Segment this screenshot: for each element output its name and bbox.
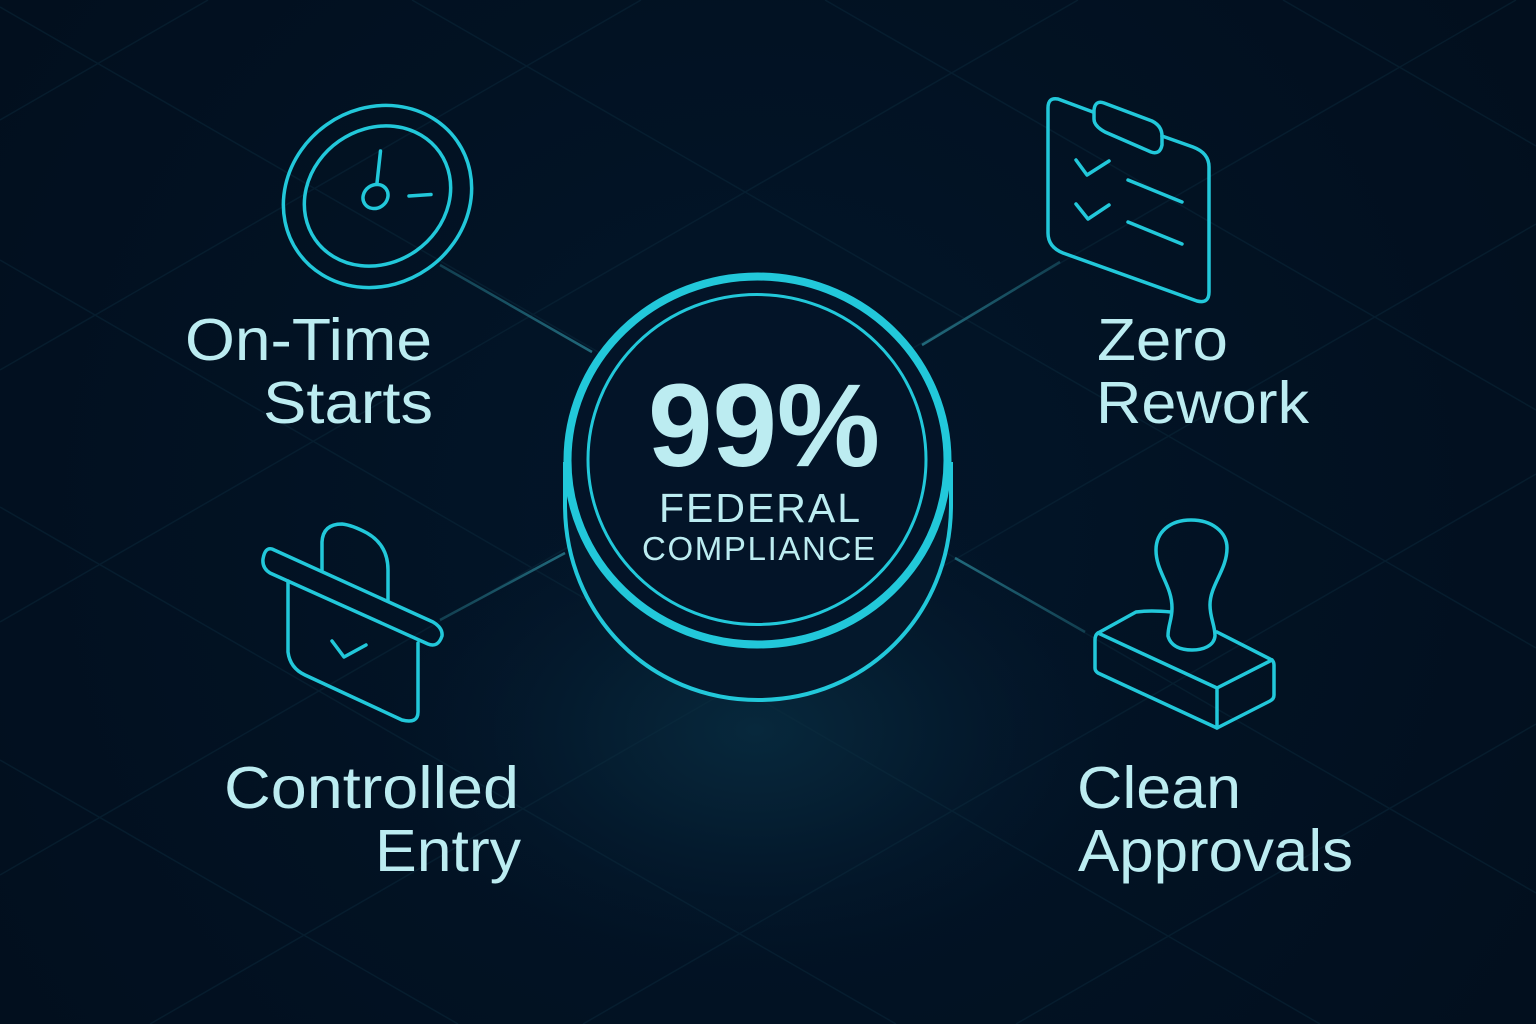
icon: padlock	[263, 524, 442, 721]
label: Clean Approvals: Approvals	[1078, 818, 1353, 884]
label: Zero Rework: Rework	[1096, 370, 1310, 436]
central compliance badge	[565, 276, 951, 700]
icon: clipboard	[1048, 99, 1209, 302]
badge rings	[565, 276, 951, 700]
label: Controlled Entry: Controlled	[224, 755, 519, 821]
label: On-Time Starts: On-Time	[185, 307, 432, 373]
label: On-Time Starts: Starts	[263, 370, 433, 436]
connector lines	[440, 262, 1085, 632]
badge label line 1: FEDERAL	[659, 485, 860, 531]
label: Clean Approvals	[1077, 755, 1353, 884]
icon: stamp	[1095, 520, 1274, 728]
badge value: 99%	[648, 360, 880, 492]
label: Clean Approvals: Clean	[1077, 755, 1241, 821]
label: Controlled Entry: Entry	[375, 818, 522, 884]
label: Zero Rework: Zero	[1097, 307, 1228, 373]
icon: clock	[248, 69, 507, 324]
badge label line 2: COMPLIANCE	[642, 530, 875, 567]
label: Zero Rework	[1096, 307, 1310, 436]
label: On-Time Starts	[185, 307, 433, 436]
label: Controlled Entry	[224, 755, 522, 884]
